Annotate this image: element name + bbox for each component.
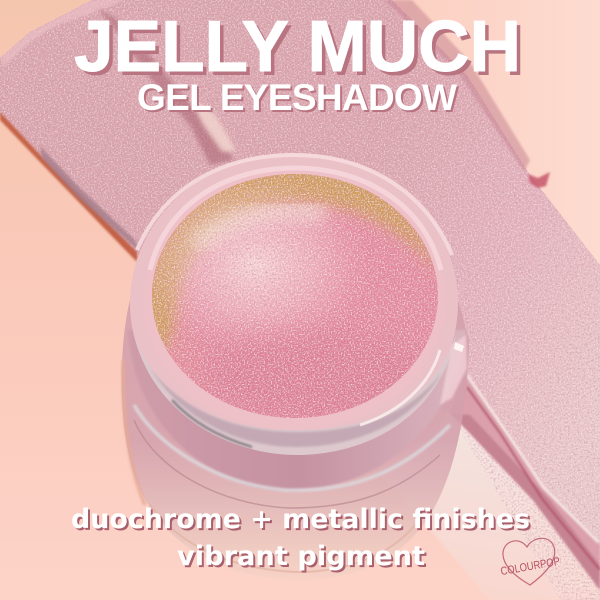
caption: vibrant pigment: vibrant pigment [177, 541, 425, 572]
swatch right crust band [450, 372, 600, 590]
swatch lower light strip [380, 413, 600, 600]
swatch top right ridge [385, 0, 530, 172]
caption: duochrome + metallic finishes: duochrome + metallic finishes [71, 504, 530, 535]
caption: vibrant pigment: vibrant pigment [179, 543, 427, 574]
jar lower body [122, 300, 469, 580]
caption: duochrome + metallic finishes: duochrome + metallic finishes [73, 506, 532, 537]
jar left edge tint [123, 360, 145, 505]
swatch top left rough edge [0, 0, 125, 66]
eyeshadow pan [152, 174, 438, 418]
subtitle: GEL EYESHADOW: GEL EYESHADOW [139, 79, 459, 120]
jar mauve band [128, 330, 466, 490]
swatch chip [528, 172, 550, 188]
title: JELLY MUCH: JELLY MUCH [74, 7, 521, 87]
subtitle: GEL EYESHADOW: GEL EYESHADOW [137, 77, 457, 118]
logo: ColourPop heart [500, 538, 561, 585]
jar outer rim [130, 153, 458, 453]
pan gold rim [152, 174, 434, 352]
title: JELLY MUCH: JELLY MUCH [78, 11, 525, 91]
jar silver line [134, 405, 450, 490]
pan pale sheen [152, 182, 354, 340]
jar rim lower glass [134, 335, 456, 455]
glass jar [122, 153, 469, 580]
swatch crease shadow [97, 8, 234, 165]
swatch dark red lower edge [0, 112, 137, 262]
logo: ColourPop heart: COLOURPOP [500, 556, 561, 578]
